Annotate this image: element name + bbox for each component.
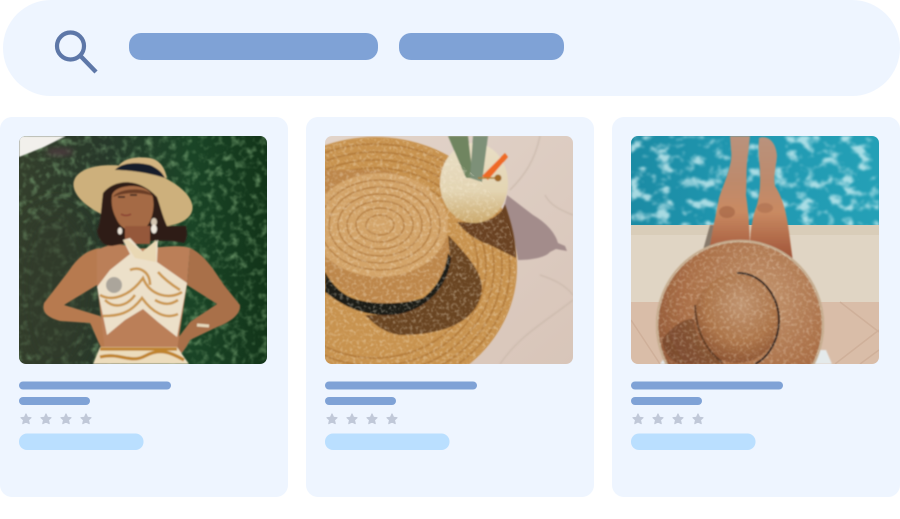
text line: product subtitle [325,397,396,405]
card 3 background [612,117,900,497]
crown top [312,173,448,277]
photo: woman in straw hat before a green hedge [15,136,267,375]
photo: sun hat and legs beside a pool [631,136,879,364]
straw weave highlights [325,138,516,364]
rating: four stars [633,414,703,424]
panel: product card 3 [612,117,900,497]
text line: product subtitle [631,397,702,405]
halter top [97,238,187,337]
left leg [710,136,751,246]
hat brim and crown [115,157,167,178]
rating: four stars [21,414,91,424]
icon: magnifying glass [57,32,96,72]
search bar background [3,0,900,96]
white garment [660,350,832,364]
button placeholder [325,434,450,450]
photo: straw hat and drink on marble [325,136,573,364]
search button placeholder [399,33,564,60]
panel: product card 1 [0,117,288,497]
card 1 background [0,117,288,497]
text line: product title [631,382,783,390]
button placeholder [631,434,756,450]
search query placeholder [129,33,378,60]
leg shadow [703,224,714,248]
card 2 background [306,117,594,497]
search bar [3,0,900,96]
earrings and bracelet [151,218,157,226]
panel: product card 2 [306,117,594,497]
rating: four stars [327,414,397,424]
text line: product subtitle [19,397,90,405]
text line: product title [325,382,477,390]
right leg [750,137,793,262]
skirt [93,347,189,364]
shadow of crown on brim [365,235,482,335]
face and neck [112,186,154,231]
hat brim [658,242,822,364]
arms and torso [42,247,106,348]
hair [97,182,187,246]
button placeholder [19,434,144,450]
hat brim [325,136,518,364]
hat band [325,253,451,315]
shadow of glass on brim [457,204,516,258]
glass shadow on marble [503,195,567,260]
glass [440,143,508,223]
straw weave highlights [658,242,822,364]
text line: product title [19,382,171,390]
hat crown [662,319,725,364]
hat crown wall [325,170,450,306]
